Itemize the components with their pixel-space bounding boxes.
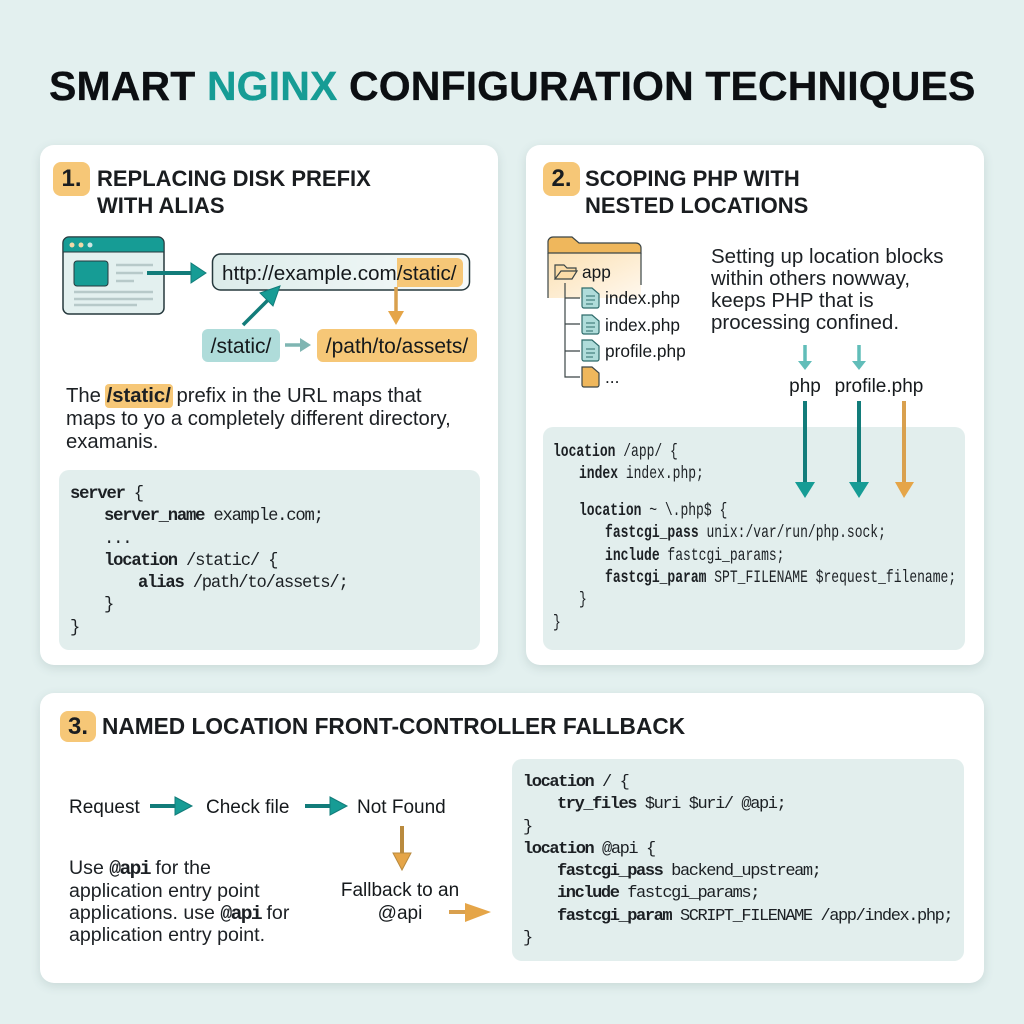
icon: file 2	[582, 315, 599, 334]
flow labels: Fallback to an	[341, 880, 459, 901]
arrow: browser to url	[147, 263, 206, 283]
panel: named location fallback	[40, 693, 984, 983]
step number 1	[53, 162, 90, 196]
code text 2: location /app/ { index index.php; location ~ \.php$ { fastcgi_pass unix:/var/run/php.sock; include fastcgi_params; fastcgi_param SPT_FILENAME $request_filename; } }	[553, 442, 956, 633]
icon: browser window	[63, 237, 164, 314]
step number 3	[60, 711, 96, 742]
flow labels	[69, 797, 459, 924]
arrow: url to path	[388, 287, 404, 325]
heading 2: SCOPING PHP WITH NESTED LOCATIONS	[585, 166, 808, 218]
arrow: check file to not found	[305, 797, 347, 815]
flow diagram	[69, 796, 491, 924]
heading 3: NAMED LOCATION FRONT-CONTROLLER FALLBACK	[102, 713, 685, 739]
diagram: URL mapping	[62, 236, 477, 362]
label: static	[202, 329, 280, 362]
icon: small folder	[555, 265, 577, 279]
panel: replacing disk prefix	[40, 145, 498, 665]
title: SMART NGINX CONFIGURATION TECHNIQUES	[49, 63, 975, 109]
labels: profile.php	[835, 376, 923, 397]
arrow: fallback to code	[449, 903, 491, 922]
step number 3: 3.	[68, 713, 88, 740]
step number 2	[543, 162, 580, 196]
description 3: Use @api for the application entry point applications. use @api for application entry point.	[69, 857, 289, 946]
flow labels: Check file	[206, 797, 289, 818]
code text 3: location / { try_files $uri $uri/ @api; } location @api { fastcgi_pass backend_upstream; include fastcgi_params; fastcgi_param SCRIPT_FILENAME /app/index.php; }	[523, 773, 952, 948]
url bar	[212, 254, 470, 290]
url bar: http://example.com/static/	[222, 262, 457, 285]
label: path to assets	[317, 329, 477, 362]
long teal arrow left	[795, 401, 815, 498]
step number 2: 2.	[551, 165, 572, 192]
panel: scoping php	[526, 145, 984, 665]
flow labels: @api	[378, 903, 422, 924]
code block 3	[512, 759, 964, 961]
long amber arrow	[895, 401, 914, 498]
labels: php	[789, 376, 821, 397]
file labels: index.php	[605, 288, 680, 308]
code block 2	[543, 427, 965, 650]
small teal arrow left	[798, 345, 812, 370]
arrow: not found to fallback	[393, 826, 411, 870]
arrow: static to url	[243, 286, 280, 325]
description 1: The /static/ prefix in the URL maps that maps to yo a completely different directory, examanis.	[66, 385, 451, 453]
label: static: /static/	[211, 335, 272, 358]
flow labels: Not Found	[357, 797, 446, 818]
arrow: static to path	[285, 338, 311, 352]
flow labels: Request	[69, 797, 140, 818]
icon: large folder	[548, 237, 641, 298]
arrows and labels: php mapping	[789, 345, 923, 498]
step number 1: 1.	[61, 165, 82, 192]
tree lines	[565, 283, 580, 377]
labels	[789, 376, 923, 397]
label: path to assets: /path/to/assets/	[326, 335, 468, 358]
file labels: ...	[605, 367, 619, 387]
small teal arrow right	[852, 345, 866, 370]
arrow: request to check file	[150, 797, 192, 815]
code text 1: server { server_name example.com; ... location /static/ { alias /path/to/assets/; } }	[70, 485, 348, 638]
file labels: profile.php	[605, 341, 686, 361]
code block 1	[59, 470, 480, 650]
file tree	[547, 236, 686, 388]
icon: file 3	[582, 340, 599, 361]
file labels: app	[582, 262, 611, 282]
icon: file 4	[582, 367, 599, 387]
description 2: Setting up location blocks within others nowway, keeps PHP that is processing confined.	[711, 245, 943, 334]
file labels: index.php	[605, 315, 680, 335]
icon: file 1	[582, 288, 599, 308]
heading 1: REPLACING DISK PREFIX WITH ALIAS	[97, 166, 371, 218]
file labels	[582, 262, 686, 387]
long teal arrow right	[849, 401, 869, 498]
